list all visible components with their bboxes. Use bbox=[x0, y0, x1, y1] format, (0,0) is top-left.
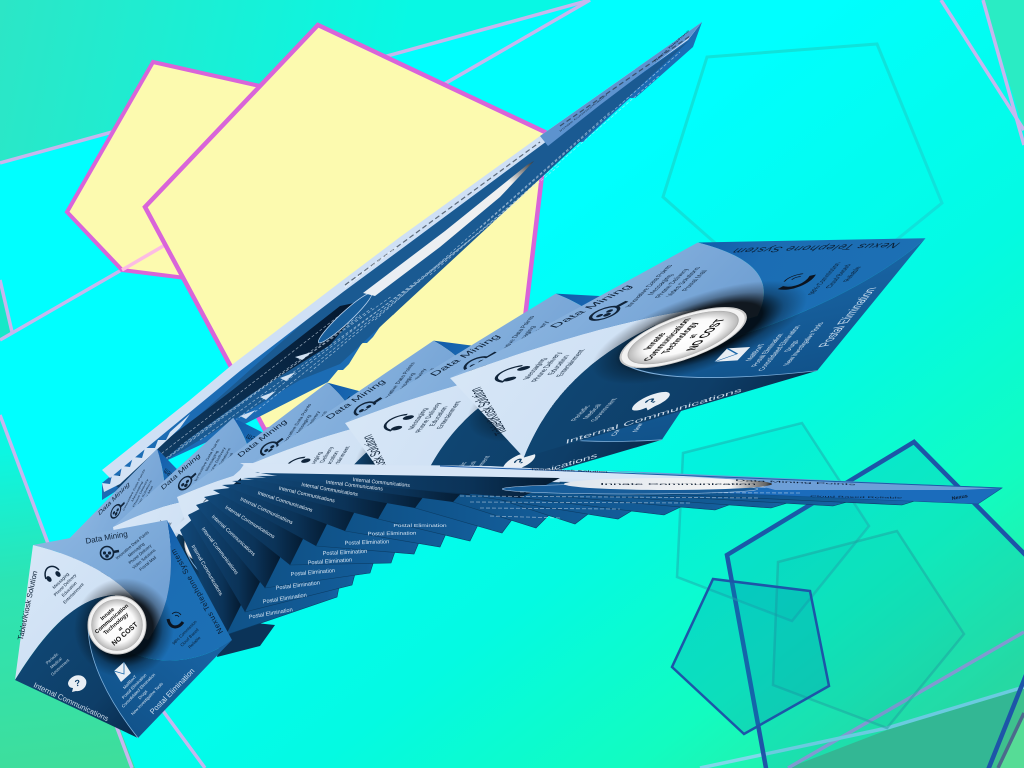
heading: nexus telephone system: Nexus Telephone System bbox=[169, 547, 225, 635]
disc drop shadow bbox=[74, 578, 174, 678]
heading: tablet kiosk solution: Tablet/Kiosk Solution bbox=[16, 570, 39, 641]
heading: postal elimination: Postal Elimination bbox=[148, 666, 196, 716]
stack labels: postal elimination: Postal Elimination bbox=[308, 557, 352, 567]
list: data mining: Video Solutions bbox=[131, 547, 157, 570]
disc text bbox=[90, 598, 144, 651]
stack labels: internal communications: Internal Communications bbox=[352, 477, 411, 489]
card strip 16 bbox=[600, 476, 1002, 504]
vane: pale tablet bbox=[15, 545, 135, 680]
disc text: Innate bbox=[100, 607, 116, 622]
fan: lower stack of cards bbox=[172, 463, 1002, 657]
background corner: top left bbox=[0, 0, 590, 162]
list: nexus telephone: 98% Commission bbox=[171, 619, 198, 646]
card strip 5 bbox=[222, 476, 470, 547]
background corner: far bottom right bbox=[998, 713, 1024, 768]
stack labels: internal communications bbox=[190, 477, 411, 597]
stack labels: postal elimination: Postal Elimination bbox=[393, 524, 447, 529]
list: postal elimination: Consolidated Elimination bbox=[121, 672, 157, 709]
heading: internal communications: Internal Communications bbox=[32, 680, 110, 723]
disc text: Technology bbox=[103, 611, 131, 637]
icon: mail bbox=[114, 662, 131, 682]
shadow wedge under stack bbox=[217, 620, 275, 657]
disc text: Communication bbox=[94, 603, 130, 635]
front card: pinwheel bbox=[15, 520, 232, 738]
stack labels: internal communications: Internal Communications bbox=[239, 496, 294, 526]
pentagon: navy outline large bbox=[727, 442, 1024, 768]
stack labels: internal communications: Internal Communications bbox=[200, 526, 239, 576]
list: tablet kiosk: Messaging bbox=[51, 571, 70, 590]
fan: largest trail card bbox=[394, 182, 1005, 484]
lilac line over back pentagon bbox=[122, 245, 165, 270]
fan: trail card 4 bbox=[213, 289, 652, 595]
card strip 4 bbox=[213, 476, 445, 554]
printed lines bbox=[460, 492, 800, 518]
far card blue ellipse bbox=[502, 484, 758, 494]
pentagon: teal outline top right bbox=[663, 44, 942, 318]
card strip 15 bbox=[580, 482, 950, 505]
card strip 0 bbox=[180, 478, 360, 635]
list: tablet kiosk: Entertainment bbox=[62, 581, 85, 605]
card strip 12 bbox=[520, 482, 770, 510]
dark wedge bbox=[110, 300, 368, 492]
center disc bbox=[88, 596, 146, 654]
pentagon: yellow back bbox=[67, 62, 420, 300]
stack labels: internal communications: Internal Communications bbox=[278, 486, 336, 505]
stack labels: postal elimination: Postal Elimination bbox=[345, 539, 389, 547]
card strip 11 bbox=[500, 482, 720, 515]
disc text: NO COST bbox=[111, 621, 140, 648]
black print on pale strip bbox=[345, 36, 690, 285]
far card black print: Data Mining Points bbox=[735, 479, 856, 486]
background wedge: left edge bbox=[0, 280, 12, 339]
stack tab edges bbox=[102, 22, 702, 500]
list: tablet kiosk: Education bbox=[61, 580, 78, 598]
stack labels: internal communications: Internal Communications bbox=[210, 514, 256, 558]
stack labels: postal elimination: Postal Elimination bbox=[323, 549, 367, 557]
card strip 1 bbox=[188, 478, 380, 612]
card strip 10 bbox=[470, 482, 670, 519]
squashed labels: Internal Communications bbox=[344, 245, 398, 288]
pentagon: yellow front bbox=[145, 25, 547, 430]
stack labels: internal communications: Internal Communications bbox=[224, 505, 276, 540]
vane: postal elimination bbox=[88, 625, 232, 738]
vane: nexus telephone bbox=[117, 520, 232, 661]
far card black print: Tablet/Kiosk Solution bbox=[530, 468, 609, 474]
vane: navy internal communications bbox=[15, 595, 138, 738]
heading: data mining: Data Mining bbox=[85, 529, 128, 546]
stack labels: postal elimination: Postal Elimination bbox=[291, 568, 335, 578]
far card light blue strip bbox=[600, 470, 1002, 490]
list: postal elimination: Postal Elimination bbox=[121, 672, 148, 700]
list: data mining: Messaging bbox=[127, 541, 146, 558]
far card black print bbox=[530, 468, 968, 502]
far card top edge bbox=[440, 466, 1002, 488]
far card pale strip bbox=[240, 463, 775, 488]
fan: trail card 2 bbox=[89, 374, 352, 684]
list: postal elimination: New Investigative Tools bbox=[130, 681, 164, 716]
card strip 3 bbox=[204, 476, 420, 565]
list: data mining bbox=[115, 530, 165, 579]
far card black print: Nexus bbox=[951, 493, 968, 502]
icon: headphones bbox=[45, 566, 62, 583]
background corner: top right bbox=[983, 0, 1024, 130]
fan: upper edge-on stack of cards bbox=[102, 22, 702, 500]
fan: trail card 3 bbox=[145, 335, 498, 641]
stack labels: internal communications: Internal Communications bbox=[257, 490, 314, 514]
light blue far strip bbox=[540, 22, 702, 146]
card strip 6 bbox=[232, 475, 500, 541]
list: nexus telephone: Reliable bbox=[187, 635, 202, 649]
icon: question bubble bbox=[68, 675, 86, 692]
card strip 9 bbox=[268, 474, 625, 524]
icon: phone bbox=[168, 612, 183, 627]
icon: question bubble: ? bbox=[74, 678, 81, 688]
disc text: at bbox=[117, 625, 124, 632]
card strip 14 bbox=[560, 482, 890, 506]
stack labels: postal elimination: Postal Elimination bbox=[275, 580, 320, 592]
pentagon: teal outline lower bbox=[773, 531, 964, 728]
list: data mining: Phone Delivery bbox=[127, 543, 153, 565]
stack labels: internal communications: Internal Communications bbox=[190, 544, 224, 597]
list: tablet kiosk bbox=[48, 568, 86, 606]
background corner: bottom right dark panel bbox=[788, 687, 1024, 768]
card strip 7 bbox=[243, 474, 540, 533]
pentagon: teal outline middle bbox=[677, 423, 869, 621]
list: data mining: Innovative Data Points bbox=[115, 530, 150, 560]
far card black print: Innate Communication bbox=[600, 483, 756, 486]
stack labels: postal elimination: Postal Elimination bbox=[368, 531, 416, 537]
card strip 2 bbox=[196, 478, 400, 588]
pentagon: navy outline small bbox=[672, 579, 829, 734]
light rim of postal vane bbox=[88, 625, 138, 738]
background corner: bottom left bbox=[0, 415, 135, 768]
squashed labels: Nexus Telephone bbox=[653, 29, 690, 62]
far card black print: Cloud Based Reliable bbox=[810, 495, 902, 499]
list: postal elimination bbox=[112, 663, 165, 717]
fan: trail card 5 bbox=[296, 238, 822, 546]
icon: magnifier with people bbox=[100, 546, 119, 560]
card strip 8 bbox=[255, 474, 580, 528]
blue ellipse sliver bbox=[315, 289, 375, 347]
list: internal communications: Medical bbox=[49, 656, 63, 670]
stack labels: postal elimination: Postal Elimination bbox=[248, 607, 293, 621]
list: data mining: Postal Mail bbox=[138, 555, 157, 572]
pale top strip bbox=[102, 22, 702, 478]
list: internal communications: Periodic bbox=[45, 652, 59, 665]
stack labels: postal elimination: Postal Elimination bbox=[262, 593, 307, 605]
list: internal communications bbox=[42, 648, 71, 677]
zigzag page edges bbox=[102, 414, 190, 492]
stack labels: internal communications: Internal Communications bbox=[301, 482, 359, 498]
fan: trail card 1 bbox=[44, 411, 227, 719]
navy wedge at far card bbox=[255, 470, 560, 498]
list: nexus telephone bbox=[171, 619, 208, 656]
list: nexus telephone: Cloud Based bbox=[179, 627, 200, 648]
white disc streak bbox=[363, 161, 534, 296]
squashed labels: Innate Communication bbox=[559, 93, 608, 132]
stack inner blue bbox=[115, 40, 690, 490]
pale strip behind page teeth bbox=[172, 463, 1001, 540]
list: internal communications: Government bbox=[50, 657, 71, 677]
far card disc streak bbox=[564, 478, 772, 490]
list: tablet kiosk: Phone Delivery bbox=[53, 572, 78, 597]
squashed labels bbox=[344, 29, 690, 288]
stack labels: internal communications: Internal Communications bbox=[326, 480, 384, 493]
stack labels: postal elimination bbox=[248, 524, 447, 621]
card strip 13 bbox=[540, 482, 830, 508]
white teeth in wedge bbox=[240, 352, 312, 419]
list: postal elimination: Drugs bbox=[137, 689, 148, 700]
vane: data mining bbox=[33, 520, 171, 640]
tiny printed lines bbox=[130, 52, 680, 478]
list: postal elimination: MailBoxT bbox=[122, 674, 138, 690]
